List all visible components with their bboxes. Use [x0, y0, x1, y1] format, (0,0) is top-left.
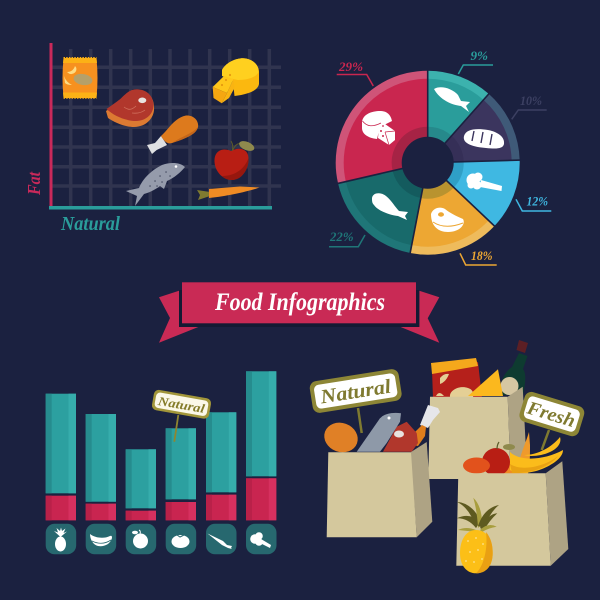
bag contents: fruit and vegetables: [463, 432, 563, 476]
bar: broccoli: [246, 371, 276, 520]
title ribbon: [159, 282, 439, 343]
axis label: Fat: Fat: [24, 171, 44, 196]
bag: left natural: [309, 368, 440, 537]
label: 9%: 9%: [470, 48, 488, 63]
ribbon band: [182, 282, 416, 323]
donut chart: [329, 48, 551, 265]
title: Food Infographics: [214, 289, 385, 316]
bag: right fresh: [456, 390, 586, 566]
axis label: Natural: Natural: [60, 213, 120, 235]
bag body: [428, 397, 511, 479]
bar: carrot: [206, 412, 236, 520]
icon: steak: [106, 89, 154, 127]
icon: white cheese: [362, 111, 395, 145]
icon: white chicken leg: [372, 193, 408, 220]
sign: Natural: Natural: [156, 394, 206, 416]
grocery bags: [309, 340, 586, 573]
bar: banana: [86, 414, 116, 520]
scatter chart: [24, 43, 281, 235]
bag body: [327, 452, 417, 537]
icon tile: carrot: [206, 524, 236, 554]
icon tile: apple: [126, 524, 156, 554]
label: 29%: [337, 59, 373, 86]
sign: Natural: [309, 368, 403, 433]
bar chart: [46, 371, 277, 554]
label: 12%: [516, 194, 551, 211]
sign: Natural: [151, 389, 212, 442]
icon: cheese: [213, 58, 259, 103]
icon: white fish: [434, 87, 470, 112]
segment: 22% chicken: [374, 109, 482, 217]
segment: 29% cheese: [373, 108, 483, 218]
bag: back with snacks: [428, 340, 528, 479]
icon: carrot: [197, 186, 260, 200]
icon tile: tomato: [166, 524, 196, 554]
label: 18%: [460, 248, 497, 265]
icon: white bread: [464, 129, 504, 149]
label: 10%: [512, 93, 547, 119]
icon: apple: [214, 139, 256, 180]
bar: apple: [126, 449, 156, 520]
icon: white broccoli: [466, 172, 502, 191]
sign: Fresh: Fresh: [524, 397, 578, 432]
label: 18%: 18%: [471, 248, 493, 263]
segment: 12% broccoli: [380, 115, 475, 210]
icon tile: broccoli: [246, 524, 276, 554]
y axis: [50, 43, 52, 208]
icon tile: pineapple: [46, 524, 76, 554]
icon tile: banana: [86, 524, 116, 554]
label: 9%: [458, 48, 493, 74]
label: 29%: 29%: [338, 59, 363, 74]
icon: fish: [126, 163, 185, 206]
ribbon right tail: [400, 291, 439, 343]
label: 10%: 10%: [520, 93, 542, 108]
bag contents: chips and bottle: [431, 340, 528, 398]
sign: Natural: Natural: [318, 376, 393, 409]
icon: chicken leg: [147, 115, 198, 154]
bag contents: chicken, fish, meat: [320, 405, 440, 457]
pineapple: [457, 498, 499, 573]
segment: 10% bread: [363, 98, 493, 228]
icon: chips bag: [62, 58, 98, 98]
label: 12%: 12%: [526, 194, 548, 208]
segment: 9% fish: [382, 117, 474, 209]
segment: 18% steak: [363, 98, 493, 228]
icon: white steak: [431, 208, 464, 232]
ribbon left tail: [159, 291, 198, 343]
label: 22%: [329, 229, 365, 247]
x axis: [49, 206, 272, 210]
bar: pineapple: [46, 394, 76, 520]
label: 22%: 22%: [329, 229, 354, 244]
bar: tomato: [166, 428, 196, 520]
bag body: [456, 473, 551, 566]
sign: Fresh: [518, 390, 586, 450]
